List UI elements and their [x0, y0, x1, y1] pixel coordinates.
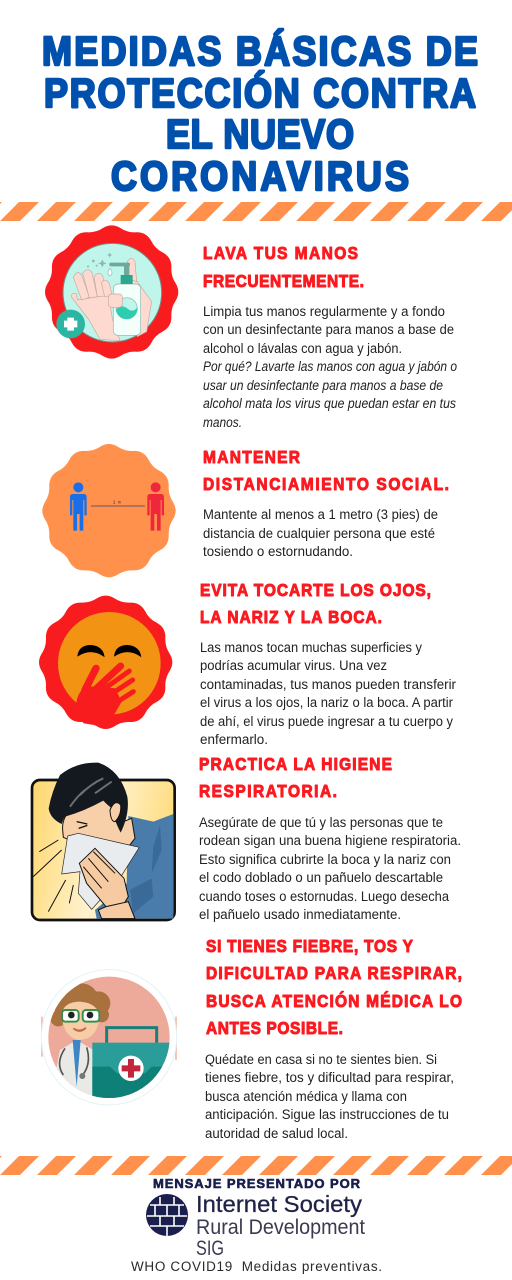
- body: higiene respiratoria: Esto significa cubrirte la boca y la nariz con: [199, 852, 451, 867]
- body: higiene respiratoria: Asegúrate de que tú y las personas que te: [199, 815, 443, 830]
- heading: atención médica: BUSCA ATENCIÓN MÉDICA LO: [206, 991, 462, 1011]
- source note: WHO COVID19 Medidas preventivas.: [131, 1259, 382, 1274]
- heading: distanciamiento: [203, 447, 449, 494]
- body: higiene respiratoria: el pañuelo usado inmediatamente.: [199, 907, 401, 922]
- logo wordmark: [196, 1191, 365, 1260]
- section 1 text: [203, 243, 457, 430]
- heading: higiene respiratoria: [199, 754, 392, 801]
- body: distanciamiento: Mantente al menos a 1 metro (3 pies) de: [203, 507, 438, 522]
- body: lava tus manos: alcohol o lávalas con agua y jabón.: [203, 341, 402, 356]
- bottom hazard stripe band: [0, 1156, 512, 1175]
- title: CORONAVIRUS: [111, 154, 409, 199]
- body: atención médica: tienes fiebre, tos y dificultad para respirar,: [205, 1070, 454, 1085]
- body: higiene respiratoria: cuando toses o estornudas. Luego desecha: [199, 889, 450, 904]
- body: higiene respiratoria: rodean sigan una buena higiene respiratoria.: [199, 833, 461, 848]
- heading: evita tocarte: EVITA TOCARTE LOS OJOS,: [200, 580, 431, 600]
- body: distanciamiento: tosiendo o estornudando.: [203, 544, 353, 559]
- heading: higiene respiratoria: PRACTICA LA HIGIENE: [199, 754, 392, 774]
- heading: lava tus manos: [203, 243, 364, 291]
- title: PROTECCIÓN CONTRA: [44, 70, 476, 116]
- body: evita tocarte: Las manos tocan muchas superficies y: [200, 640, 422, 655]
- footer: presented by: MENSAJE PRESENTADO POR: [153, 1176, 361, 1191]
- body: evita tocarte: enfermarlo.: [200, 732, 268, 747]
- body: lava tus manos: [203, 304, 457, 430]
- title: [42, 28, 478, 199]
- body: lava tus manos: Por qué? Lavarte las manos con agua y jabón o: [203, 359, 457, 374]
- top hazard stripe band: [0, 202, 512, 221]
- heading: lava tus manos: LAVA TUS MANOS: [203, 243, 358, 263]
- heading: atención médica: ANTES POSIBLE.: [206, 1018, 343, 1038]
- body: higiene respiratoria: [199, 815, 461, 922]
- logo wordmark: SIG: [196, 1237, 224, 1260]
- body: evita tocarte: de ahí, el virus puede ingresar a tu cuerpo y: [200, 714, 453, 729]
- body: atención médica: busca atención médica y llama con: [205, 1089, 407, 1104]
- body: evita tocarte: [200, 640, 457, 747]
- icon: social distancing badge: [42, 444, 176, 577]
- logo wordmark: Internet Society: [196, 1191, 363, 1217]
- heading: lava tus manos: FRECUENTEMENTE.: [203, 271, 364, 291]
- body: lava tus manos: Limpia tus manos regularmente y a fondo: [203, 304, 445, 319]
- icon: man sneezing into tissue: [32, 763, 175, 920]
- body: atención médica: Quédate en casa si no te sientes bien. Si: [205, 1052, 437, 1067]
- title: MEDIDAS BÁSICAS DE: [42, 28, 478, 74]
- heading: atención médica: [206, 936, 462, 1038]
- body: lava tus manos: con un desinfectante para manos a base de: [203, 322, 454, 337]
- body: lava tus manos: manos.: [203, 415, 242, 430]
- body: atención médica: [205, 1052, 454, 1141]
- body: lava tus manos: alcohol mata los virus que puedan estar en tus: [203, 396, 456, 411]
- body: atención médica: autoridad de salud local.: [205, 1126, 348, 1141]
- body: distanciamiento: [203, 507, 438, 559]
- icon: social distancing badge: 1 m: [113, 501, 121, 506]
- body: higiene respiratoria: el codo doblado o un pañuelo descartable: [199, 870, 443, 885]
- section 5 text: [205, 936, 462, 1141]
- body: evita tocarte: el virus a los ojos, la nariz o la boca. A partir: [200, 695, 454, 710]
- icon: covering mouth badge: [39, 596, 172, 729]
- logo wordmark: Rural Development: [196, 1216, 365, 1239]
- icon: doctor with medical kit: [41, 970, 177, 1105]
- icon: Internet Society globe logo: [146, 1194, 188, 1236]
- section 3 text: [200, 580, 457, 747]
- body: evita tocarte: contaminadas, tus manos pueden transferir: [200, 677, 457, 692]
- heading: atención médica: DIFICULTAD PARA RESPIRAR,: [206, 963, 462, 983]
- body: atención médica: anticipación. Sigue las instrucciones de tu: [205, 1107, 449, 1122]
- icon: washing hands badge: [45, 225, 178, 359]
- heading: atención médica: SI TIENES FIEBRE, TOS Y: [206, 936, 413, 956]
- title: EL NUEVO: [166, 112, 354, 157]
- heading: evita tocarte: [200, 580, 431, 627]
- section 4 text: [199, 754, 461, 922]
- body: lava tus manos: usar un desinfectante para manos a base de: [203, 378, 443, 393]
- body: evita tocarte: podrías acumular virus. Una vez: [200, 658, 387, 673]
- heading: distanciamiento: MANTENER: [203, 447, 300, 467]
- heading: higiene respiratoria: RESPIRATORIA.: [199, 781, 337, 801]
- heading: distanciamiento: DISTANCIAMIENTO SOCIAL.: [203, 474, 449, 494]
- body: distanciamiento: distancia de cualquier persona que esté: [203, 526, 435, 541]
- heading: evita tocarte: LA NARIZ Y LA BOCA.: [200, 607, 382, 627]
- section 2 text: [203, 447, 449, 559]
